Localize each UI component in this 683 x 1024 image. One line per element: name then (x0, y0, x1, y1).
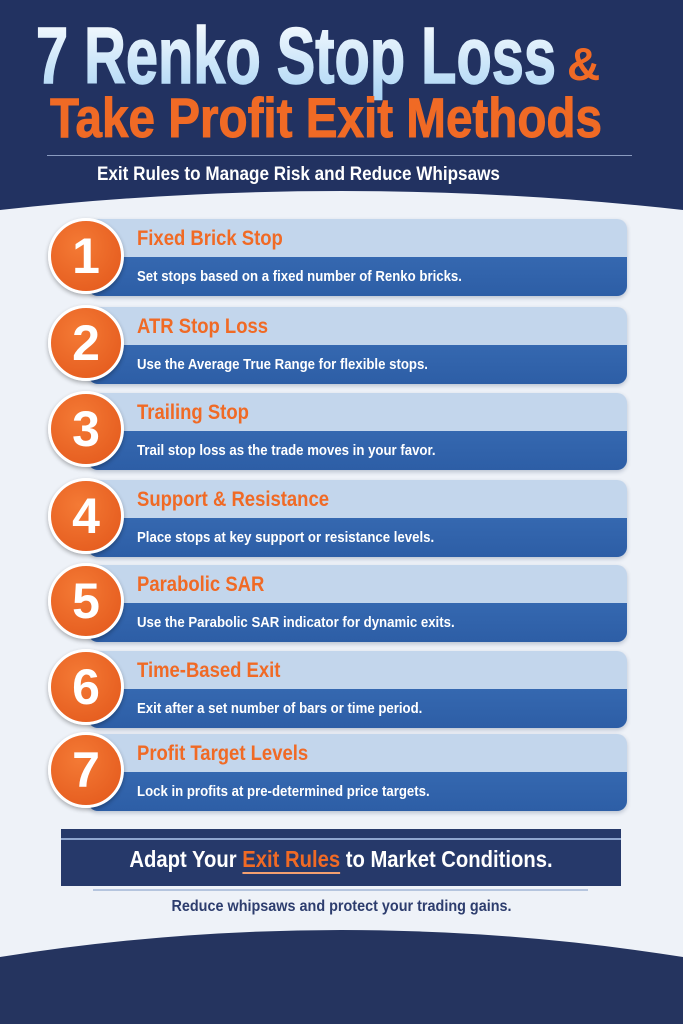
card 2: ATR Stop Loss (137, 315, 268, 338)
card 3 (88, 393, 627, 470)
icon: number 5 (48, 563, 124, 639)
card 6: Time-Based Exit (137, 659, 280, 682)
card 5 (88, 565, 627, 642)
icon: number 1: 1 (72, 228, 100, 284)
card 3: Trail stop loss as the trade moves in your favor. (137, 442, 436, 459)
card 7 (88, 734, 627, 811)
icon: number 6 (48, 649, 124, 725)
icon: number 3: 3 (72, 401, 100, 457)
subtitle: Exit Rules to Manage Risk and Reduce Whipsaws (97, 164, 500, 185)
icon: number 7 (48, 732, 124, 808)
icon: number 5: 5 (72, 573, 100, 629)
card 7: Profit Target Levels (137, 742, 308, 765)
footer text: Reduce whipsaws and protect your trading gains. (171, 898, 512, 915)
card 6: Exit after a set number of bars or time period. (137, 700, 422, 717)
card 1: Fixed Brick Stop (137, 227, 283, 250)
title: & (567, 38, 600, 90)
card 7: Lock in profits at pre-determined price targets. (137, 783, 430, 800)
title: Take Profit Exit Methods (50, 86, 602, 149)
card 5: Use the Parabolic SAR indicator for dynamic exits. (137, 614, 455, 631)
banner (61, 829, 621, 886)
card 3: Trailing Stop (137, 401, 249, 424)
icon: number 2 (48, 305, 124, 381)
card 1: Set stops based on a fixed number of Renko bricks. (137, 268, 462, 285)
card 4 (88, 480, 627, 557)
icon: number 2: 2 (72, 315, 100, 371)
card 4: Support & Resistance (137, 488, 329, 511)
card 4: Place stops at key support or resistance levels. (137, 529, 434, 546)
icon: number 6: 6 (72, 659, 100, 715)
card 2: Use the Average True Range for flexible stops. (137, 356, 428, 373)
title (36, 11, 602, 149)
banner: Adapt Your Exit Rules to Market Conditions. (129, 846, 553, 872)
icon: number 7: 7 (72, 742, 100, 798)
icon: number 4: 4 (72, 488, 100, 544)
icon: number 4 (48, 478, 124, 554)
card 1 (88, 219, 627, 296)
card 6 (88, 651, 627, 728)
icon: number 3 (48, 391, 124, 467)
card 2 (88, 307, 627, 384)
card 5: Parabolic SAR (137, 573, 264, 596)
icon: number 1 (48, 218, 124, 294)
